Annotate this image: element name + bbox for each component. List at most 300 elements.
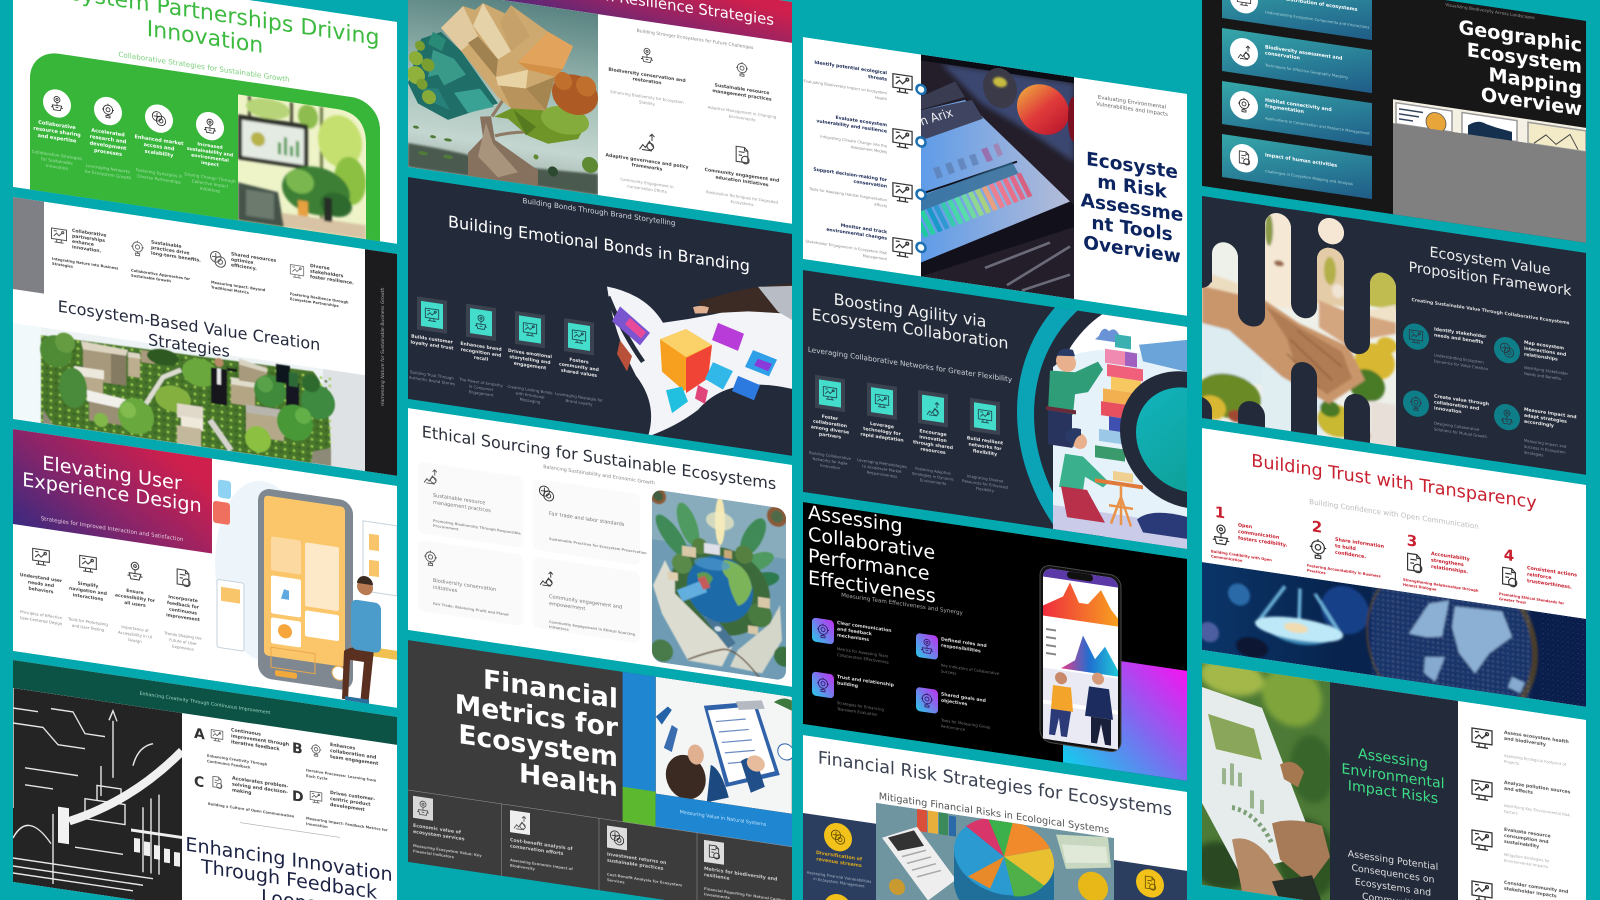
- risk item 3: Effects: [874, 203, 887, 208]
- subtitle: Building Stronger Ecosystems for Future Challenges: [637, 28, 754, 51]
- caption: Vulnerabilities and Impacts: [1096, 101, 1168, 118]
- item 1: Stability: [639, 99, 656, 107]
- title: Geographic: [1459, 16, 1582, 57]
- item 3: Adaptive governance and policy: [605, 153, 689, 171]
- dark centre column: [1330, 682, 1458, 900]
- item: accelerated research: research and: [90, 134, 127, 145]
- step 3: Creating Lasting Bonds: [507, 384, 553, 395]
- caption: Measuring Value in Natural Systems: [680, 809, 767, 828]
- metric item 4: Tools for Measuring Group: [941, 717, 990, 730]
- risk item 3: [808, 166, 912, 212]
- trust step 1: communication: [1238, 529, 1280, 541]
- risk item 4: Management: [863, 254, 888, 262]
- list row 3: fragmentation: [1265, 103, 1304, 115]
- step 3: [912, 389, 954, 487]
- title: Health: [519, 758, 618, 804]
- card 2: [533, 479, 647, 566]
- card 4: Community Engagement in Ethical Sourcing: [549, 620, 635, 637]
- strategy 1: revenue streams: [816, 856, 862, 869]
- list row 2: Biodiversity assessment and: [1265, 45, 1342, 62]
- risk item 3: Support decision-making for: [813, 168, 887, 183]
- item 3: all users: [124, 600, 146, 609]
- card 3: [418, 539, 523, 626]
- impact item 4: [1472, 875, 1568, 900]
- list row 2: Techniques for Effective Geography Mapping: [1264, 63, 1348, 80]
- item: accelerated research: [85, 94, 131, 181]
- step 1: among diverse: [811, 424, 849, 436]
- item 2: interactions: [73, 592, 104, 603]
- item 3: efficiency.: [231, 262, 257, 272]
- grey corner block: [13, 197, 44, 294]
- card 1: [418, 461, 523, 548]
- item: enhanced market access: access and: [144, 142, 175, 153]
- item 1: Enhancing Biodiversity for Ecosystem: [610, 89, 684, 105]
- step 2: in Consumer: [469, 384, 494, 392]
- step 4: Fosters: [569, 358, 589, 366]
- trust step 3: relationships.: [1431, 564, 1468, 575]
- item 4: education initiatives: [715, 175, 769, 188]
- item: increased sustainability: impact: [201, 160, 220, 169]
- image: tablet chart and apple: h Arix: [918, 105, 955, 129]
- risk item 4: Monitor and track: [841, 224, 887, 235]
- item 4: Future of User: [169, 637, 197, 646]
- item 3: frameworks: [632, 162, 663, 173]
- panel: Financial Risk Strategies for Ecosystems: [803, 735, 1187, 900]
- trust step 3: Honest Dialogue: [1403, 583, 1437, 592]
- card 1: management practices: [433, 500, 491, 514]
- item 3: Importance of: [121, 624, 149, 633]
- item A: A: [194, 726, 205, 743]
- metric item 1: and feedback: [837, 626, 873, 638]
- step 4: [555, 317, 603, 408]
- step 3: resources: [920, 446, 946, 456]
- step 2: [857, 381, 907, 480]
- step 4: networks for: [969, 442, 1002, 452]
- step 2: Leveraging Methodologies: [857, 457, 907, 469]
- subtitle: Assessing Potential: [1348, 849, 1438, 873]
- value item 2: Needs and Benefits: [1524, 371, 1561, 381]
- image: scales and digital globe: [1202, 562, 1586, 707]
- item B: Enhances: [330, 743, 355, 752]
- item 4: continuous: [169, 607, 197, 617]
- subtitle: Strategies for Improved Interaction and Satisfaction: [41, 516, 184, 543]
- strategy 1: [807, 819, 871, 890]
- image: tablet chart and apple: [921, 54, 1074, 299]
- illustration: brand shape: [607, 256, 792, 458]
- step 3: with Emotional: [516, 390, 544, 400]
- subtitle: Measuring Team Effectiveness and Synergy: [841, 593, 963, 617]
- step 1: Building Trust Through: [410, 369, 454, 381]
- step 4: flexibility: [973, 448, 997, 458]
- item A: Continuous: [231, 728, 261, 738]
- list row 2: [1222, 28, 1372, 93]
- item: collaborative resource sharing: Collaborative Strategies: [32, 149, 82, 161]
- step 2: [458, 302, 504, 399]
- title: Overview: [1481, 83, 1582, 121]
- title: Building Trust with Transparency: [1251, 451, 1537, 514]
- step 1: Builds customer: [411, 334, 453, 346]
- list row 3: Habitat connectivity and: [1265, 98, 1332, 113]
- title: m Risk: [1097, 172, 1167, 203]
- cell 2: Cost-benefit analysis of: [510, 838, 573, 852]
- strategy 3: [1136, 867, 1164, 899]
- subtitle: Consequences on: [1351, 863, 1435, 886]
- card 4: Initiatives: [549, 625, 569, 632]
- item D: D: [292, 788, 304, 806]
- blue strip: [623, 672, 656, 793]
- item 1: Principles of Effective: [20, 609, 62, 620]
- step 1: Innovation: [820, 463, 841, 471]
- item: enhanced market access: [134, 101, 184, 185]
- trust step 4: trustworthiness.: [1527, 578, 1572, 591]
- impact item 1: Projects: [1504, 759, 1519, 766]
- band caption: Enhancing Creativity Through Continuous Improvement: [140, 691, 271, 716]
- item: collaborative resource sharing: for Sustainable: [41, 156, 73, 166]
- step 3: [507, 310, 553, 406]
- metric item 1: mechanisms: [837, 632, 869, 643]
- item: increased sustainability: Driving Change Through: [184, 171, 236, 184]
- step 3: storytelling and: [509, 354, 551, 366]
- item 2: long-term benefits.: [151, 250, 201, 264]
- item 2: Sustainable resource: [715, 83, 769, 96]
- impact item 1: Assessing Ecological Footprint of: [1504, 753, 1566, 767]
- risk item 4: Stakeholder Engagement in Ecosystem Risk: [806, 239, 887, 255]
- cell 1: Financial Indicators: [413, 849, 455, 859]
- panel: Ecosystem Resilience Strategies: [407, 0, 792, 224]
- top band: [13, 660, 397, 745]
- item: increased sustainability: Increased: [197, 142, 223, 151]
- trust step 1: 1: [1215, 503, 1225, 522]
- title: Impact Risks: [1348, 778, 1438, 807]
- cell 4: resilience: [704, 872, 730, 882]
- risk item 2: Integrating Climate Change into the: [820, 135, 887, 148]
- value item 3: collaboration and: [1434, 399, 1479, 412]
- item: increased sustainability: [184, 108, 236, 196]
- image: clipboard and man: [656, 676, 792, 814]
- cell 3: [607, 825, 682, 893]
- value item 4: Strategies: [1524, 450, 1543, 458]
- value item 2: Map ecosystem: [1524, 341, 1564, 352]
- node 4: [916, 242, 926, 253]
- metric item 3: Teamwork Evaluation: [836, 706, 878, 717]
- risk item 3: Tools for Assessing Habitat Fragmentation: [809, 187, 887, 202]
- item 2: Environments: [729, 113, 755, 122]
- cell 1: Measuring Ecosystem Value: Key: [413, 844, 482, 858]
- title: Ecosystem Value: [1429, 245, 1551, 279]
- step 3: Fostering Adaptive: [915, 466, 951, 476]
- item: increased sustainability: sustainability and: [187, 146, 233, 159]
- item: accelerated research: processes: [94, 148, 122, 158]
- item: collaborative resource sharing: Collaborative: [38, 120, 76, 131]
- item 3: optimize: [231, 257, 253, 266]
- title: Financial Risk Strategies for Ecosystems: [818, 748, 1172, 821]
- step 1: partners: [819, 431, 841, 441]
- value item 4: accordingly: [1524, 419, 1554, 429]
- item 2: and User Testing: [72, 623, 105, 633]
- step 3: engagement: [514, 361, 547, 372]
- item C: [194, 776, 294, 818]
- list row 3: [1222, 81, 1372, 146]
- item 4: Community engagement and: [705, 168, 779, 184]
- impact item 2: [1472, 775, 1571, 824]
- image: globe in hands: [652, 490, 786, 680]
- card 3: Biodiversity conservation: [433, 578, 496, 593]
- item D: centric product: [330, 796, 371, 808]
- impact item 1: [1472, 725, 1569, 773]
- value item 3: Create value through: [1434, 394, 1489, 407]
- item 4: Restoration Techniques for Degraded: [706, 189, 778, 205]
- cell 2: Assessing Economic Impact of: [510, 858, 573, 871]
- trust step 3: strengthens: [1431, 557, 1464, 568]
- photo: garden model: [13, 323, 365, 471]
- title: Experience Design: [22, 468, 202, 517]
- title: Strategies: [148, 330, 230, 361]
- vertical caption: Harnessing Nature for Sustainable Business Growth: [380, 287, 386, 406]
- title: Building Emotional Bonds in Branding: [448, 212, 750, 276]
- row divider: [408, 790, 792, 900]
- card 4: [533, 557, 640, 643]
- item: accelerated research: Leveraging Networks: [86, 163, 130, 174]
- item 2: [67, 554, 108, 633]
- metric item 4: objectives: [941, 698, 968, 708]
- impact item 3: [1472, 822, 1551, 870]
- subtitle: Creating Sustainable Value Through Collaborative Ecosystems: [1412, 297, 1570, 326]
- item 4: improvement: [166, 612, 201, 623]
- trust step 3: Accountability: [1431, 552, 1470, 563]
- item: enhanced market access: Diverse Partnerships: [137, 173, 181, 185]
- item 1: needs and: [28, 579, 54, 589]
- item 2: Adaptive Management in Changing: [708, 104, 776, 120]
- step 3: through shared: [913, 439, 953, 451]
- impact item 3: Evaluate resource: [1504, 828, 1551, 840]
- item: collaborative resource sharing: Innovation: [46, 163, 68, 171]
- step 2: The Power of Empathy: [459, 377, 503, 388]
- risk item 1: Evaluating Biodiversity Impact on Ecosystem: [804, 79, 887, 95]
- step 4: Flexibility: [976, 486, 995, 493]
- item A: improvement through: [231, 733, 289, 748]
- metric item 3: [812, 670, 895, 720]
- strategy 1: in Ecosystem Management: [813, 876, 865, 889]
- step 2: recall: [474, 355, 489, 363]
- value item 2: interactions and: [1524, 346, 1566, 358]
- panel: Building Emotional Bonds in Branding: [408, 177, 792, 458]
- image: origami tree: [408, 0, 598, 195]
- step 4: Leveraging Nostalgia for: [555, 391, 603, 403]
- panel: Ethical Sourcing for Sustainable Ecosystems: [408, 408, 794, 688]
- item: collaborative resource sharing: resource sharing: [33, 126, 81, 139]
- title: Assessing: [808, 501, 903, 538]
- cell 2: Biodiversity: [510, 864, 536, 871]
- item 1: Strategies: [52, 262, 73, 269]
- subtitle: Ecosystems and: [1355, 877, 1431, 899]
- metric item 3: building: [837, 680, 858, 689]
- metric item 1: Metrics for Assessing Team: [837, 646, 888, 659]
- panel: Assessing Collaborative Performance Effectiveness: [803, 500, 1187, 781]
- title: Ecosystem: [458, 719, 618, 774]
- trust step 4: reinforce: [1527, 572, 1552, 581]
- item 2: Sustainable Growth: [131, 273, 171, 283]
- step 4: shared values: [561, 368, 597, 379]
- item 3: Traditional Metrics: [211, 285, 249, 295]
- risk item 2: [816, 112, 912, 158]
- trust step 1: fosters credibility.: [1238, 535, 1287, 549]
- cell 4: Metrics for biodiversity and: [704, 867, 777, 883]
- item 1: [608, 43, 686, 111]
- cell 2: [510, 810, 573, 877]
- item 4: Diverse: [310, 264, 330, 272]
- item 3: Community Engagement in: [620, 176, 674, 189]
- item 3: accessibility for: [115, 592, 156, 604]
- risk item 2: vulnerability and resilience: [816, 118, 887, 135]
- value item 4: Success in Ecosystem: [1524, 444, 1566, 455]
- impact item 4: Consider community and: [1504, 881, 1568, 895]
- title: Ecosyste: [1086, 149, 1178, 183]
- cell 4: Investments: [704, 892, 731, 900]
- trust step 4: [1499, 545, 1577, 613]
- step 2: recognition and: [461, 347, 501, 359]
- item 4: Incorporate: [168, 595, 198, 604]
- item 4: foster resilience.: [310, 274, 354, 286]
- title: Proposition Framework: [1409, 260, 1572, 300]
- metric item 2: Key Indicators of Collaborative: [941, 662, 999, 676]
- trust step 4: Greater Trust: [1499, 597, 1526, 605]
- metric item 3: Trust and relationship: [837, 675, 894, 688]
- item 3: Conservation Efforts: [627, 183, 667, 194]
- title: Overview: [1083, 233, 1181, 268]
- item 3: [115, 559, 156, 646]
- trust step 4: 4: [1504, 546, 1514, 565]
- item B: Iterative Processes: Learning from: [306, 768, 376, 783]
- trust step 2: confidence.: [1335, 550, 1366, 560]
- item 4: [705, 142, 779, 211]
- title: Metrics for: [455, 689, 619, 744]
- title: Ecosystem: [1467, 38, 1582, 78]
- title: Mapping: [1488, 63, 1582, 100]
- step 3: innovation: [919, 434, 947, 444]
- list row 1: [1222, 0, 1372, 40]
- item: collaborative resource sharing: and expertise: [38, 133, 77, 145]
- item: enhanced market access: Enhanced market: [134, 134, 184, 147]
- header band: [503, 0, 792, 43]
- impact item 1: Assess ecosystem health: [1504, 731, 1569, 745]
- caption: Evaluating Environmental: [1098, 95, 1166, 111]
- metric item 1: Clear communication: [837, 621, 892, 634]
- item 3: Shared resources: [231, 252, 276, 264]
- item: accelerated research: Accelerated: [91, 128, 125, 139]
- risk item 3: conservation: [854, 179, 887, 190]
- title: Effectiveness: [808, 566, 936, 608]
- list row 3: Applications in Conservation and Resource Management: [1265, 116, 1370, 136]
- strategy 1: Diversification of: [816, 851, 862, 863]
- header gradient block: [13, 429, 212, 553]
- risk item 1: Health: [875, 96, 888, 102]
- item A: Enhancing Creativity Through: [207, 754, 267, 767]
- item 1: enhance: [72, 239, 94, 248]
- green panel: [30, 53, 380, 242]
- panel: Ecosystem Risk Assessment Tools Overview: [803, 37, 1187, 316]
- item 4: Trends Shaping the: [164, 630, 202, 641]
- subtitle: Mitigating Financial Risks in Ecological Systems: [879, 791, 1109, 836]
- item 1: innovation.: [72, 244, 101, 255]
- subtitle: Building Bonds Through Brand Storytelling: [523, 196, 675, 228]
- item D: development: [330, 802, 365, 813]
- image: line-art city: [13, 688, 182, 900]
- item 4: Ecosystem Partnerships: [290, 297, 339, 308]
- item 2: Tools for Prototyping: [68, 616, 108, 627]
- title: Innovation: [147, 16, 263, 59]
- item C: C: [194, 774, 204, 791]
- item: accelerated research: for Ecosystem Growth: [85, 169, 131, 181]
- item A: [194, 728, 289, 769]
- cell 4: [704, 840, 785, 900]
- item 2: navigation and: [69, 586, 107, 597]
- metric item 2: responsibilities: [941, 643, 981, 655]
- cell 3: Cost-Benefit Analysis for Ecosystem: [607, 872, 682, 888]
- illustration: ring and team: [1017, 234, 1373, 642]
- item 1: Collaborative: [72, 229, 106, 239]
- item 3: Design: [128, 637, 142, 644]
- item 2: practices drive: [151, 245, 189, 257]
- right navy panel: [1114, 860, 1187, 900]
- metric item 4: Performance: [941, 723, 966, 732]
- card 2: Fair trade and labor standards: [549, 511, 625, 528]
- trust step 4: Promoting Ethical Standards for: [1499, 592, 1564, 606]
- cell 1: ecosystem services: [413, 829, 465, 843]
- item D: Measuring Impact: Feedback Metrics for: [306, 816, 388, 832]
- step 4: Integrating Diverse: [967, 473, 1003, 484]
- item 4: Fostering Resilience through: [290, 292, 348, 305]
- risk item 1: [804, 58, 912, 105]
- value item 4: adapt strategies: [1524, 413, 1567, 425]
- step 2: technology for: [863, 426, 902, 438]
- subtitle: Balancing Sustainability and Economic Growth: [543, 464, 655, 487]
- metric item 1: [812, 616, 892, 665]
- panel: Elevating User Experience Design: [13, 429, 397, 711]
- item C: solving and decision-: [232, 781, 288, 796]
- title: Ethical Sourcing for Sustainable Ecosystems: [422, 422, 776, 493]
- item 1: [20, 546, 63, 626]
- item 4: Ecosystems: [730, 199, 754, 207]
- risk item 1: threats: [868, 74, 887, 83]
- card 1: Procurement: [433, 524, 459, 532]
- item D: [293, 790, 388, 832]
- item 1: Biodiversity conservation and: [608, 68, 686, 84]
- item 3: Ensure: [126, 589, 144, 596]
- panel: Boosting Agility via Ecosystem Collaboration: [803, 202, 1373, 642]
- cell 2: conservation efforts: [510, 843, 564, 857]
- strategy 2: [824, 892, 852, 900]
- image: report in forest: [1202, 663, 1330, 900]
- item: accelerated research: development: [90, 141, 127, 152]
- value item 2: relationships: [1524, 352, 1558, 363]
- item B: [293, 742, 378, 782]
- trust step 1: Open: [1238, 523, 1252, 530]
- step 2: Leverage: [870, 422, 894, 430]
- item 4: feedback for: [167, 600, 200, 611]
- title: Boosting Agility via: [834, 290, 986, 331]
- step 4: Brand Loyalty: [566, 398, 593, 407]
- item 1: [51, 227, 118, 270]
- value item 2: [1494, 335, 1568, 382]
- illustration: phone and person: [213, 474, 397, 711]
- panel: Ecosystem Partnerships Driving Innovation: [13, 0, 397, 244]
- step 1: [409, 295, 455, 386]
- item 3: [605, 127, 689, 198]
- title: Enhancing Innovation: [185, 833, 393, 886]
- cell 1: [413, 796, 482, 863]
- metric item 2: Defined roles and: [941, 637, 987, 649]
- card 3: initiatives: [433, 585, 458, 594]
